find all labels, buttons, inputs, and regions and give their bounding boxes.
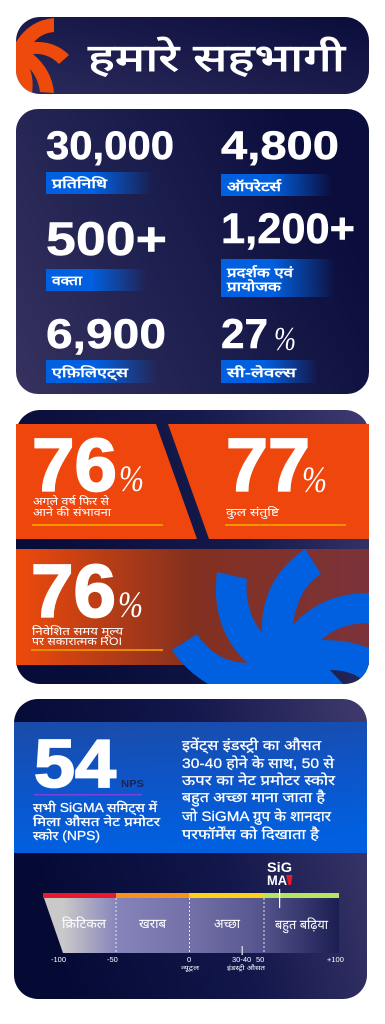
stat: affiliates: एफ़िलिएट्स <box>51 365 130 381</box>
chart: NPS scale: क्रिटिकल <box>62 916 106 931</box>
chart: NPS scale: खराब <box>139 916 167 931</box>
panel: satisfaction statistics <box>16 410 369 684</box>
chart: NPS scale: अच्छा <box>214 916 241 931</box>
stat: return next year <box>32 423 163 526</box>
icon: orange logo <box>16 18 69 94</box>
orange card left <box>16 424 197 539</box>
icon: SiGMA marker: MA <box>267 873 287 888</box>
stat: NPS 54: 54 <box>34 726 116 802</box>
chart: NPS scale: 0 <box>187 955 191 964</box>
chart: NPS scale: 50 <box>256 955 264 964</box>
chart: NPS scale: +100 <box>327 955 344 964</box>
text block: industry comparison: 30-40 होने के साथ, 50 से <box>182 755 335 771</box>
stat: speakers: 500+ <box>46 212 167 265</box>
stat: overall satisfaction: % <box>302 460 327 501</box>
stat: C-levels <box>221 310 318 383</box>
stat: operators: 4,800 <box>221 124 339 168</box>
stat: exhibitors and sponsors: प्रदर्शक एवं <box>226 265 294 280</box>
text block: industry comparison: इवेंट्स इंडस्ट्री का औसत <box>182 737 322 754</box>
panel: net promoter score <box>14 699 367 999</box>
stat: ROI: % <box>118 585 143 626</box>
stat: C-levels: सी-लेवल्स <box>226 365 298 380</box>
chart: NPS scale: इंडस्ट्री औसत <box>227 964 265 972</box>
chart: NPS scale: न्यूट्रल <box>181 965 200 972</box>
stat: affiliates: 6,900 <box>46 310 166 357</box>
text block: industry comparison: जो SiGMA ग्रुप के शानदार <box>182 808 331 825</box>
stat: ROI: पर सकारात्मक ROI <box>32 636 122 648</box>
stat: NPS 54 <box>33 726 161 843</box>
chart: NPS scale <box>43 893 344 972</box>
stat: ROI: निवेशित समय मूल्य <box>32 625 124 639</box>
text block: industry comparison: बहुत अच्छा माना जाता है <box>182 789 326 807</box>
stat: NPS 54: NPS <box>121 779 144 790</box>
stat: return next year: % <box>119 459 144 500</box>
stat: ROI <box>31 549 163 651</box>
blue band <box>14 722 367 853</box>
stat: ROI: 76 <box>31 549 116 633</box>
chart: NPS scale: 30-40 <box>232 955 251 964</box>
stat: exhibitors and sponsors <box>221 205 355 297</box>
icon: SiGMA marker <box>267 860 292 908</box>
stat: overall satisfaction: कुल संतुष्टि <box>226 506 280 519</box>
stat: return next year: आने की संभावना <box>33 506 111 519</box>
stat: operators <box>221 124 339 196</box>
stat: exhibitors and sponsors: 1,200+ <box>221 205 355 253</box>
gradient card bottom <box>16 549 369 665</box>
panel: attendee statistics <box>16 109 369 394</box>
stat: NPS 54: सभी SiGMA समिट्स में <box>33 800 158 816</box>
chart: NPS scale: -100 <box>51 955 66 964</box>
header banner <box>16 17 369 94</box>
stat: speakers <box>46 212 167 291</box>
chart: NPS scale: बहुत बढ़िया <box>275 917 329 934</box>
stat: NPS 54: मिला औसत नेट प्रमोटर <box>33 814 161 829</box>
stat: speakers: वक्ता <box>51 273 83 288</box>
stat: operators: ऑपरेटर्स <box>227 179 283 194</box>
stat: delegates: 30,000 <box>46 124 174 168</box>
text block: industry comparison: परफॉर्मेंस को दिखाता है <box>182 826 320 842</box>
stat: affiliates <box>46 310 166 383</box>
stat: NPS 54: स्कोर (NPS) <box>33 828 100 843</box>
text block: industry comparison: ऊपर का नेट प्रमोटर स्कोर <box>182 772 335 788</box>
title: हमारे सहभागी <box>88 36 347 80</box>
stat: overall satisfaction <box>225 423 346 526</box>
stat: C-levels: % <box>274 321 296 358</box>
stat: return next year: 76 <box>32 423 117 507</box>
icon: blue logo swirl <box>172 549 369 684</box>
stat: return next year: अगले वर्ष फिर से <box>33 495 110 508</box>
text block: industry comparison <box>182 737 335 842</box>
stat: exhibitors and sponsors: प्रायोजक <box>226 279 282 294</box>
orange card right <box>168 424 369 539</box>
icon: SiGMA marker: SiG <box>267 860 292 875</box>
stat: delegates: प्रतिनिधि <box>51 176 108 191</box>
stat: delegates <box>46 124 174 194</box>
chart: NPS scale: -50 <box>107 955 118 964</box>
stat: overall satisfaction: 77 <box>226 423 310 507</box>
stat: C-levels: 27 <box>221 310 268 357</box>
